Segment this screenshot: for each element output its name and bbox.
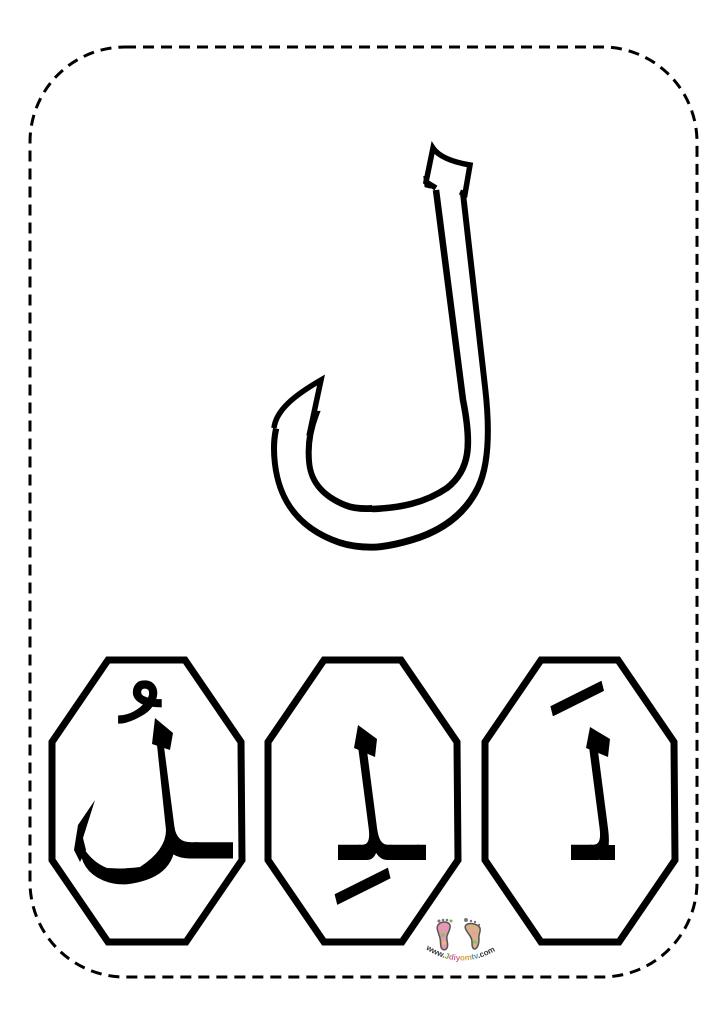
tile: initial form with fatha [485, 660, 675, 942]
letter tail tip [74, 800, 95, 862]
letter: final lam: ـل [49, 702, 256, 899]
letter: medial lam: ـــلـــ [258, 702, 481, 901]
large outlined letter lam [203, 72, 542, 585]
letter: initial lam: لـ [543, 702, 626, 901]
letter stem inner edge [372, 190, 468, 509]
icon: left footprint [437, 919, 452, 950]
logo: footprints and site address [426, 918, 495, 962]
fatha mark: لَـ [485, 680, 657, 931]
letter head [354, 725, 377, 757]
tile: final form with damma [49, 660, 265, 942]
letter head [426, 148, 470, 194]
icon: right footprint [464, 918, 480, 949]
letter tail tip [274, 380, 321, 436]
letter head [586, 727, 610, 757]
site address: www.Jdiyomtv.com [426, 946, 495, 962]
tile: medial form with kasra [264, 656, 462, 946]
letter head [152, 718, 173, 750]
letter body: ل [203, 72, 542, 585]
